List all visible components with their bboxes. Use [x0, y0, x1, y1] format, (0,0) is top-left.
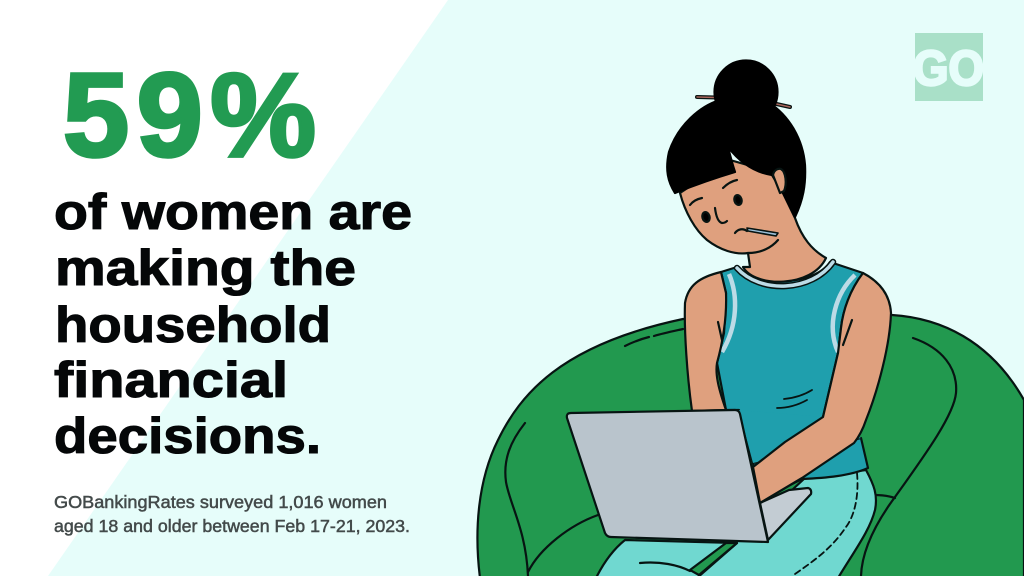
big statistic: 59%: 59% [63, 49, 316, 182]
headline text [54, 184, 412, 464]
ear [773, 169, 786, 193]
headline text: decisions. [54, 408, 321, 464]
jeans [596, 470, 876, 576]
illustration: woman on beanbag with laptop [477, 60, 1024, 576]
headline text: financial [54, 352, 288, 408]
tank top [717, 262, 868, 500]
hair and bun [667, 60, 805, 217]
facial features [690, 180, 778, 236]
hair sticks [697, 97, 790, 107]
left arm [685, 272, 726, 411]
left arm crease [718, 322, 722, 340]
survey source note: GOBankingRates surveyed 1,016 women [54, 492, 387, 512]
laptop base [760, 488, 811, 540]
neck and face [680, 160, 833, 286]
headline text: household [55, 297, 331, 353]
survey source note [54, 492, 410, 536]
headline text: making the [55, 240, 356, 296]
right arm and hand [753, 273, 891, 503]
logo: GO: GO [913, 42, 984, 96]
headline text: of women are [54, 184, 412, 240]
laptop lid [567, 410, 768, 542]
beanbag chair [477, 315, 1024, 576]
right arm crease [843, 320, 852, 345]
survey source note: aged 18 and older between Feb 17-21, 2023. [54, 516, 410, 536]
